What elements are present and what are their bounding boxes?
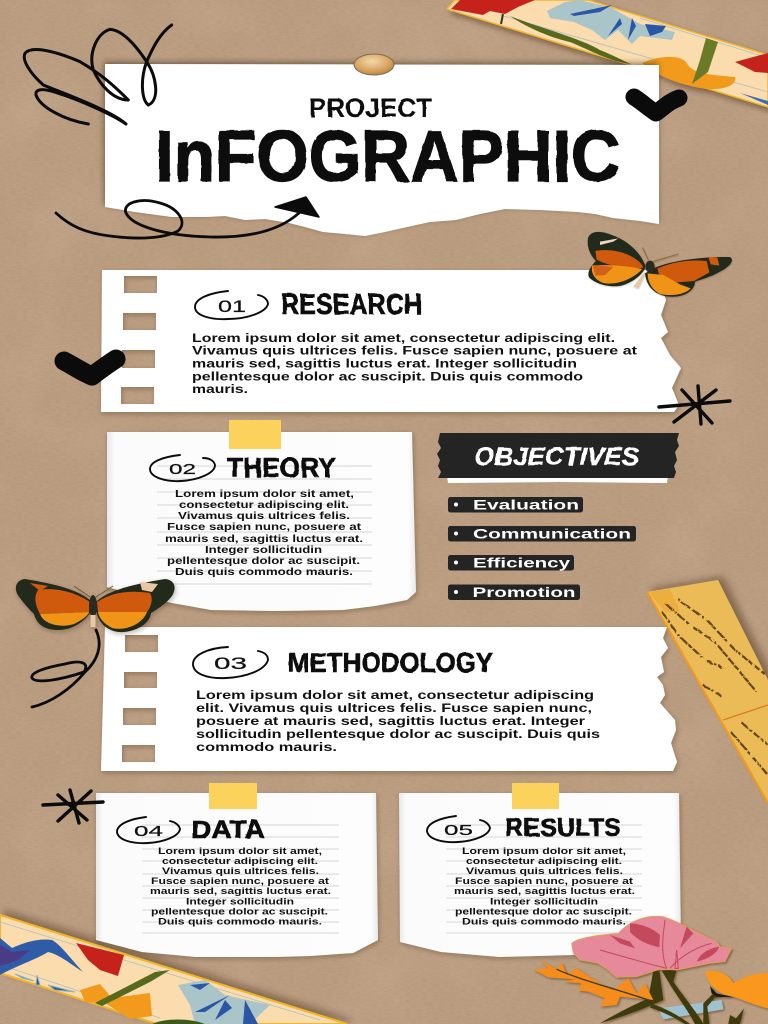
panel: objectives — [437, 433, 679, 600]
body text: data: mauris sed, sagittis luctus erat. — [150, 886, 331, 897]
body text: data: Vivamus quis ultrices felis. — [162, 866, 319, 877]
item: promotion: Promotion — [472, 585, 576, 600]
number badge 04 — [117, 817, 180, 843]
panel: 04 data — [96, 783, 378, 957]
body text: data: Duis quis commodo mauris. — [158, 916, 322, 928]
item: communication — [448, 526, 636, 542]
heading: objectives: OBJECTIVES — [474, 443, 639, 471]
heading: research: RESEARCH — [281, 289, 422, 321]
icon: heart left — [64, 359, 116, 376]
number badge 02 — [150, 455, 215, 481]
item: communication: Communication — [473, 526, 631, 542]
body text: methodology: commodo mauris. — [196, 742, 337, 754]
body text: research: mauris. — [192, 384, 248, 396]
number badge 01 — [195, 291, 268, 319]
body text: results: mauris sed, sagittis luctus erat. — [454, 886, 635, 897]
body text: theory: Fusce sapien nunc, posuere at — [167, 522, 362, 533]
icon: thumb tack — [354, 54, 394, 75]
body text: results: Duis quis commodo mauris. — [462, 916, 626, 928]
body text: results: Lorem ipsum dolor sit amet, — [462, 846, 626, 857]
washi tape: right handwriting — [647, 580, 768, 803]
body text: methodology — [196, 690, 600, 754]
icon: butterfly top right — [588, 232, 732, 297]
body text: methodology: sollicitudin pellentesque dolor ac suscipit. Duis quis — [196, 729, 600, 741]
body text: theory — [165, 489, 363, 578]
body text: methodology: elit. Vivamus quis ultrices felis. Fusce sapien nunc, — [196, 703, 592, 715]
icon: heart top right — [634, 97, 679, 113]
body text: results: consectetur adipiscing elit. — [466, 856, 622, 867]
tape: theory — [229, 420, 281, 449]
icon: asterisk right — [659, 386, 730, 424]
panel: 01 research — [101, 270, 681, 412]
number badge 02: 02 — [169, 461, 196, 478]
body text: data — [150, 846, 331, 928]
body text: results: Integer sollicitudin — [490, 896, 598, 908]
ruled lines — [142, 825, 339, 933]
body text: research: pellentesque dolor ac suscipit. Duis quis commodo — [192, 372, 583, 384]
banner — [437, 433, 679, 478]
body text: research: mauris sed, sagittis luctus erat. Integer sollicitudin — [192, 358, 577, 370]
body text: results: Vivamus quis ultrices felis. — [466, 866, 623, 877]
ruled lines — [446, 825, 642, 933]
item: evaluation: Evaluation — [473, 498, 579, 512]
icon: butterfly left — [16, 579, 175, 632]
white underline strip — [447, 476, 668, 483]
number badge 05 — [427, 816, 490, 842]
number badge 03: 03 — [214, 654, 247, 673]
item: efficiency: Efficiency — [473, 556, 571, 570]
item: evaluation — [448, 497, 583, 512]
heading: results: RESULTS — [505, 814, 621, 842]
icon: asterisk left — [43, 790, 103, 823]
body text: results: pellentesque dolor ac suscipit. — [455, 906, 632, 918]
body text: research: Vivamus quis ultrices felis. Fusce sapien nunc, posuere at — [192, 346, 637, 358]
number badge 05: 05 — [444, 822, 473, 839]
panel: 03 methodology — [101, 627, 677, 771]
icon: flower bouquet — [533, 916, 768, 1024]
title line: project: PROJECT — [309, 93, 432, 123]
body text: data: consectetur adipiscing elit. — [162, 856, 318, 867]
item: efficiency — [448, 555, 574, 570]
icon: hummingbird — [0, 938, 83, 975]
body text: methodology: posuere at mauris sed, sagittis luctus erat. Integer — [196, 716, 586, 728]
body text: data: Integer sollicitudin — [186, 896, 294, 908]
washi tape: bottom left floral — [0, 915, 347, 1024]
item: promotion — [448, 584, 580, 600]
title line: infographic: InFOGRAPHIC — [155, 117, 620, 197]
body text: theory: mauris sed, sagittis luctus erat. — [165, 534, 363, 545]
body text: results — [454, 846, 635, 928]
body text: theory: pellentesque dolor ac suscipit. — [167, 556, 360, 567]
tape: results — [512, 783, 559, 809]
body text: theory: Lorem ipsum dolor sit amet, — [175, 489, 354, 500]
body text: data: Fusce sapien nunc, posuere at — [151, 876, 330, 887]
heading: data: DATA — [191, 816, 265, 844]
body text: theory: consectetur adipiscing elit. — [179, 500, 349, 511]
icon: scribble top left — [24, 25, 172, 124]
arrow: swirl under title — [56, 197, 319, 238]
body text: research — [192, 333, 637, 396]
body text: theory: Integer sollicitudin — [205, 545, 322, 556]
body text: data: pellentesque dolor ac suscipit. — [151, 906, 328, 918]
body text: theory: Vivamus quis ultrices felis. — [178, 511, 350, 522]
washi tape: top right floral — [447, 0, 768, 107]
heading: methodology: METHODOLOGY — [288, 647, 493, 678]
number badge 04: 04 — [134, 823, 163, 840]
icon: curl under butterfly — [32, 630, 99, 707]
body text: research: Lorem ipsum dolor sit amet, consectetur adipiscing elit. — [192, 333, 615, 345]
number badge 03 — [193, 647, 268, 678]
body text: methodology: Lorem ipsum dolor sit amet, consectetur adipiscing — [196, 690, 594, 702]
tape: data — [209, 783, 257, 809]
body text: data: Lorem ipsum dolor sit amet, — [158, 846, 322, 857]
number badge 01: 01 — [218, 297, 246, 316]
heading: theory: THEORY — [227, 452, 336, 483]
panel: 02 theory — [107, 420, 416, 611]
body text: theory: Duis quis commodo mauris. — [175, 567, 353, 578]
ruled lines — [157, 466, 372, 584]
panel: title paper — [105, 64, 659, 236]
title heading — [155, 93, 620, 197]
body text: results: Fusce sapien nunc, posuere at — [455, 876, 634, 887]
panel: 05 results — [399, 783, 681, 957]
